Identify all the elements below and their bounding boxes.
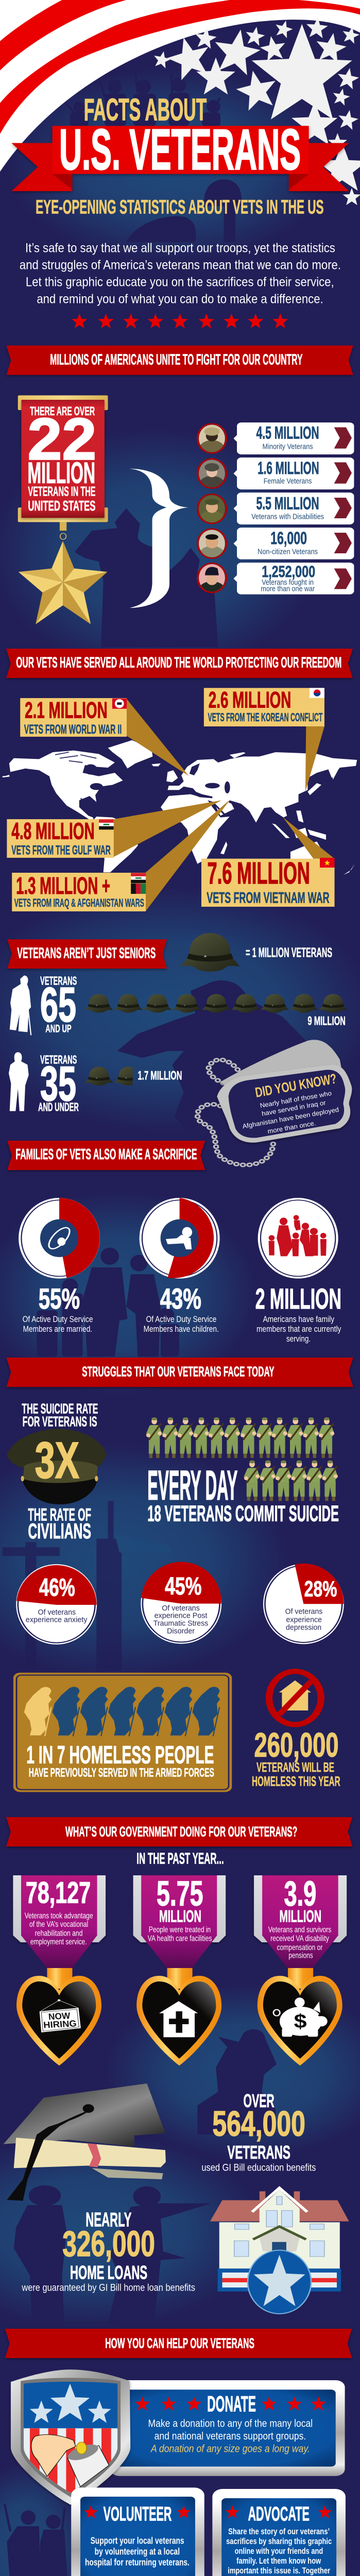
pie chart: PTSD 45% xyxy=(141,1562,221,1644)
icon: flag xyxy=(112,699,127,709)
panel: veterans 65 and up: AND UP xyxy=(45,1023,72,1035)
callout: iraq and afghanistan: 1.3 MILLION + xyxy=(16,872,110,899)
row: fought in more than one war xyxy=(198,562,354,597)
panel: 564,000 GI bill: VETERANS xyxy=(227,2142,290,2163)
pie chart: PTSD 45%: Disorder xyxy=(167,1626,195,1635)
row: non-citizen veterans: 16,000 xyxy=(270,529,307,548)
pie chart: PTSD 45%: Traumatic Stress xyxy=(153,1619,209,1628)
callout: vietnam war xyxy=(201,818,335,907)
panel: 55 percent married: Of Active Duty Service xyxy=(23,1315,93,1324)
icon: officer cap xyxy=(7,1429,107,1504)
panel: veterans 35 and under: VETERANS xyxy=(40,1053,77,1066)
section banner: served around the world xyxy=(6,649,353,678)
callout: world war II: VETS FROM WORLD WAR II xyxy=(24,722,122,737)
panel: veterans 65 and up: VETERANS xyxy=(40,974,77,988)
section banner: struggles xyxy=(6,1358,353,1387)
panel: 55 percent married: Members are married. xyxy=(23,1325,92,1334)
helmet row: 1.7 million xyxy=(84,1066,133,1086)
panel: volunteer: hospital for returning veterans. xyxy=(85,2556,190,2568)
icon: flag xyxy=(99,819,114,829)
callout: world war II: 2.1 MILLION xyxy=(25,697,108,723)
icon: now hiring heart xyxy=(16,1968,101,2065)
panel: suicide rate 3x: THE RATE OF xyxy=(28,1505,91,1524)
callout: gulf war: VETS FROM THE GULF WAR xyxy=(11,843,111,857)
callout: dog tag did you know: Nearly half of those who xyxy=(260,1090,332,1109)
medal ribbon: VETERANS IN THE xyxy=(28,485,95,499)
callout: korean conflict xyxy=(204,687,324,792)
panel: 18 suicides every day xyxy=(146,1417,339,1526)
text: VETERANS AREN’T JUST SENIORS xyxy=(17,945,156,961)
helmet row: nine million xyxy=(85,994,347,1013)
panel: veterans 35 and under: AND UNDER xyxy=(38,1100,79,1114)
text: THE SUICIDE RATE xyxy=(22,1401,98,1417)
panel: vocational rehabilitation medal xyxy=(13,1875,106,2065)
panel: 43 percent children: 43% xyxy=(160,1283,201,1315)
panel: 55 percent married: 55% xyxy=(39,1283,80,1315)
panel: volunteer: VOLUNTEER xyxy=(104,2502,172,2525)
panel: 43 percent children: Of Active Duty Service xyxy=(146,1315,216,1324)
text: FOR VETERANS IS xyxy=(23,1414,97,1430)
panel: 326,000 home loans: NEARLY xyxy=(85,2209,131,2231)
row: non-citizen veterans: Non-citizen Veterans xyxy=(258,547,318,556)
medal ribbon: 3.9 xyxy=(284,1874,316,1913)
medal ribbon: 78,127 xyxy=(26,1876,91,1909)
panel: suicide rate 3x: CIVILIANS xyxy=(28,1520,91,1543)
callout: dog tag did you know: have served in Iraq or xyxy=(261,1099,327,1117)
callout: iraq and afghanistan: VETS FROM IRAQ & AFGHANISTAN WARS xyxy=(14,896,144,909)
medal ribbon xyxy=(18,395,108,522)
row: minority veterans xyxy=(198,422,354,457)
panel: volunteer: Support your local veterans xyxy=(91,2535,184,2546)
panel: veterans 35 and under: 35 xyxy=(40,1056,76,1111)
red stars xyxy=(84,2505,191,2518)
row of red stars xyxy=(72,313,288,328)
icon: now hiring heart: HIRING xyxy=(43,2019,77,2030)
icon: graduation cap and diploma xyxy=(4,2083,166,2201)
medal ribbon: of the VA’s vocational xyxy=(29,1920,88,1928)
row: veterans with disabilities xyxy=(198,493,354,528)
section banner: not just seniors xyxy=(7,939,167,969)
panel: 22 million medal: MILLION xyxy=(27,457,95,489)
row: non-citizen veterans xyxy=(198,528,354,563)
medal ribbon: VA health care facilities xyxy=(148,1934,212,1943)
medal ribbon xyxy=(13,1875,106,1968)
panel: veterans 35 and under xyxy=(9,1052,182,1114)
icon: flag xyxy=(310,688,324,698)
pie chart: PTSD 45%: experience Post xyxy=(155,1611,208,1620)
pie chart: PTSD 45%: 45% xyxy=(165,1572,201,1600)
row: fought in more than one war: Veterans fought in xyxy=(262,578,314,586)
medal ribbon: compensation or xyxy=(277,1943,322,1952)
curly brace xyxy=(129,469,188,608)
panel: suicide rate 3x: 3X xyxy=(35,1432,79,1488)
text: 1.7 MILLION xyxy=(138,1069,182,1083)
medal ribbon xyxy=(133,1874,226,1968)
icon: now hiring heart: NOW xyxy=(48,2011,71,2022)
icon: piggy bank heart xyxy=(258,1968,342,2065)
icon: shield with donation hand xyxy=(11,2369,130,2505)
hero header xyxy=(0,0,360,218)
panel: 2 million family members xyxy=(255,1198,341,1344)
panel: volunteer: by volunteering at a local xyxy=(95,2546,180,2557)
medal ribbon: MILLION xyxy=(159,1907,201,1926)
panel: 43 percent children: Members have children. xyxy=(144,1325,219,1334)
pie chart: anxiety 46%: 46% xyxy=(39,1573,75,1601)
icon: family in circle xyxy=(258,1198,338,1279)
panel: veteran groups xyxy=(198,422,354,597)
medal ribbon: 22 xyxy=(27,406,96,472)
row: fought in more than one war: 1,252,000 xyxy=(262,562,315,581)
icon: young man xyxy=(9,1052,29,1111)
pie chart: depression 28% xyxy=(263,1564,344,1644)
row: fought in more than one war: more than one war xyxy=(261,584,315,593)
row: minority veterans: Minority Veterans xyxy=(263,442,313,451)
callout: dog tag did you know: Afghanistan have been deployed xyxy=(242,1106,339,1130)
panel: 1 in 7 homeless xyxy=(13,1673,232,1792)
pie chart: PTSD 45%: Of veterans xyxy=(162,1603,200,1612)
callout: dog tag did you know xyxy=(197,1040,352,1165)
panel: donate: DONATE xyxy=(207,2392,256,2416)
pie chart: anxiety 46%: experience anxiety xyxy=(26,1615,88,1624)
icon: piggy bank heart: $ xyxy=(294,2010,307,2032)
medal ribbon: employment service. xyxy=(30,1937,87,1946)
world map xyxy=(2,740,357,875)
pie chart: depression 28%: Of veterans xyxy=(285,1607,323,1616)
medal ribbon: pensions xyxy=(288,1951,313,1960)
panel: VA health care medal xyxy=(133,1874,226,2065)
pie chart: depression 28%: experience xyxy=(286,1615,322,1624)
icon row: seven walkers xyxy=(24,1687,220,1736)
icon row: twelve soldiers xyxy=(146,1417,335,1458)
medal ribbon: UNITED STATES xyxy=(28,498,95,514)
medal ribbon: rehabilitation and xyxy=(35,1929,82,1938)
panel: 564,000 GI bill xyxy=(201,2091,316,2173)
icon: no home xyxy=(269,1671,321,1724)
panel: 55 percent married xyxy=(19,1198,100,1334)
panel: 326,000 home loans: 326,000 xyxy=(62,2224,155,2264)
donut chart: children xyxy=(140,1198,220,1279)
panel: 22 million medal xyxy=(18,395,188,624)
icon: hospital heart xyxy=(136,1968,221,2065)
panel: disability compensation medal xyxy=(254,1874,347,2065)
medal ribbon xyxy=(254,1874,347,1968)
icon: house with star badge xyxy=(210,2188,349,2314)
pie chart: depression 28%: depression xyxy=(286,1623,321,1632)
icon: man with cane xyxy=(10,975,31,1035)
pie chart: anxiety 46%: Of veterans xyxy=(38,1607,76,1616)
medal ribbon: 5.75 xyxy=(157,1874,203,1913)
callout: gulf war: 4.8 MILLION xyxy=(11,819,95,844)
panel: 43 percent children xyxy=(140,1198,220,1334)
callout: gulf war xyxy=(7,800,221,858)
intro paragraph xyxy=(20,241,341,306)
callout: iraq and afghanistan xyxy=(12,800,230,911)
panel: advocate xyxy=(212,2489,346,2576)
flag stripes arc xyxy=(0,0,360,172)
panel: 326,000 home loans: were guaranteed by GI Bill home loan benefits xyxy=(22,2282,195,2293)
text: IN THE PAST YEAR... xyxy=(136,1850,224,1867)
panel: volunteer xyxy=(71,2487,204,2576)
pie chart: anxiety 46% xyxy=(16,1564,97,1645)
panel: donate xyxy=(110,2380,345,2476)
callout: world war II xyxy=(20,697,188,776)
donut chart: married xyxy=(19,1198,100,1279)
row: veterans with disabilities: Veterans with Disabilities xyxy=(251,512,324,521)
section banner: millions of americans xyxy=(6,346,353,375)
icon: flags xyxy=(131,873,146,894)
gold star medal xyxy=(19,522,108,624)
panel: veterans 65 and up xyxy=(10,974,347,1035)
medal ribbon: Veterans took advantage xyxy=(25,1911,93,1920)
row: female veterans: Female Veterans xyxy=(264,477,312,485)
panel: 564,000 GI bill: OVER xyxy=(244,2091,275,2111)
title ribbon xyxy=(11,126,349,191)
panel: suicide rate 3x xyxy=(7,1401,107,1543)
medal ribbon: People were treated in xyxy=(149,1925,211,1934)
icon: flag xyxy=(320,858,335,868)
red stars xyxy=(135,2397,326,2411)
row: female veterans xyxy=(198,457,354,493)
callout: dog tag did you know: more than once. xyxy=(267,1120,316,1135)
decorative white stars xyxy=(152,16,360,205)
legend: helmet equals one million xyxy=(180,933,332,972)
panel: veterans 65 and up: 65 xyxy=(40,977,76,1032)
icon row: six soldiers xyxy=(244,1460,338,1501)
panel: 326,000 home loans xyxy=(22,2209,195,2293)
section banner: government xyxy=(6,1817,352,1846)
panel: 326,000 home loans: HOME LOANS xyxy=(70,2262,147,2283)
panel: 2 million family members: serving. xyxy=(286,1334,311,1344)
medal ribbon: THERE ARE OVER xyxy=(30,404,95,418)
red stars xyxy=(226,2505,332,2518)
panel: 260,000 homeless xyxy=(252,1671,340,1789)
section banner: families xyxy=(7,1141,205,1170)
section banner: how you can help xyxy=(5,2329,352,2358)
